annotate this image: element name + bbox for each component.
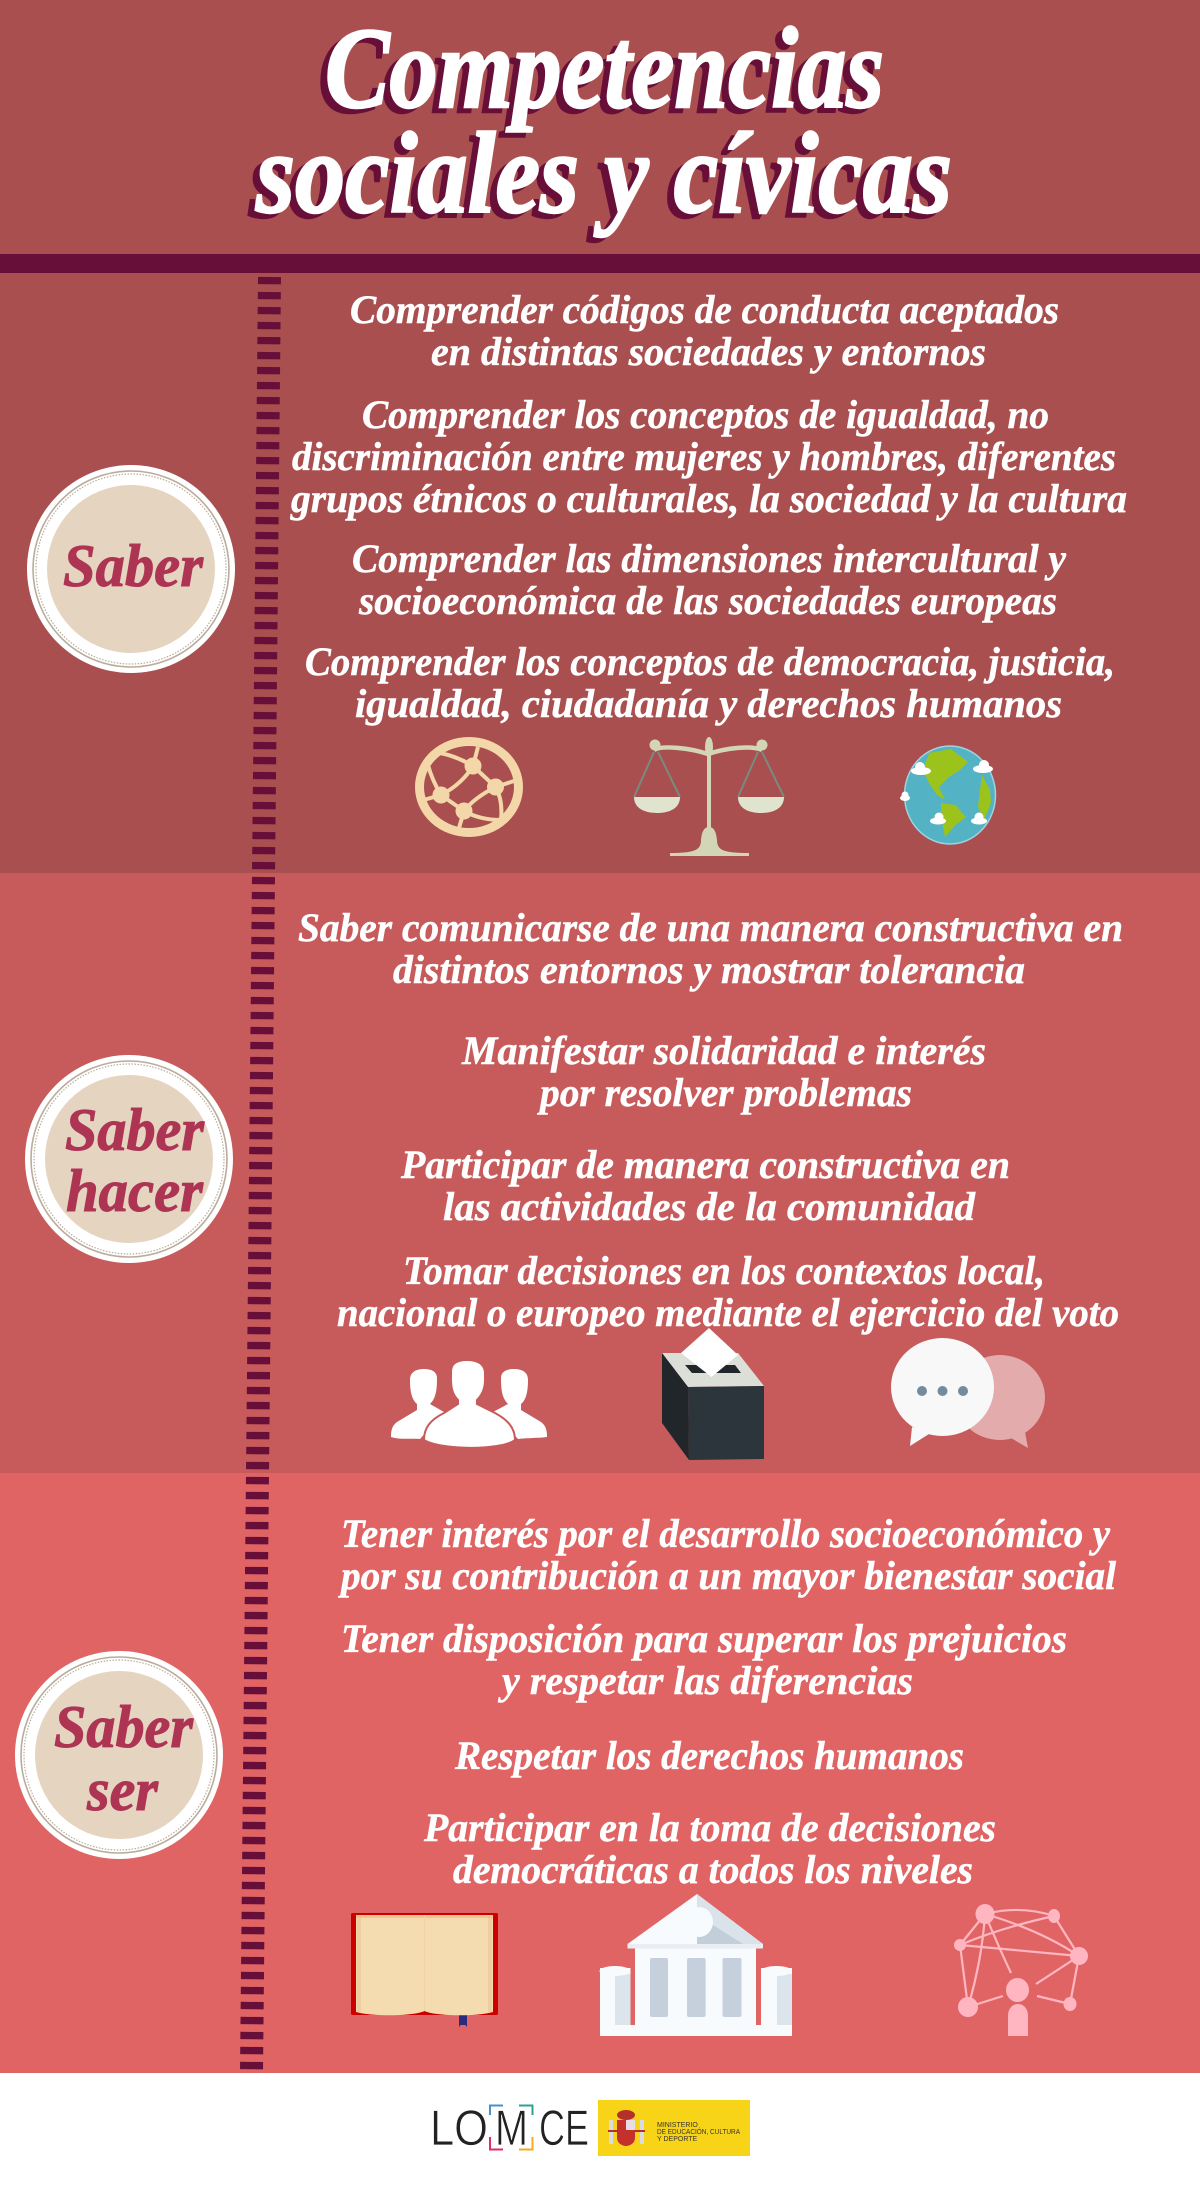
header band bbox=[0, 0, 1200, 254]
panel: saber text: discriminación entre mujeres y hombres, diferentes bbox=[292, 434, 1116, 479]
panel: saber text: Comprender códigos de conducta aceptados bbox=[350, 287, 1059, 332]
panel: saber hacer text bbox=[298, 905, 1123, 1335]
panel: saber hacer text: por resolver problemas bbox=[537, 1070, 912, 1115]
section background: saber bbox=[0, 273, 1200, 873]
badge: saber hacer: hacer bbox=[66, 1158, 204, 1224]
icon: open book bbox=[351, 1913, 498, 2027]
title: sociales y cívicas bbox=[255, 110, 952, 237]
badge: saber hacer bbox=[25, 1055, 233, 1263]
panel: saber text: Comprender las dimensiones intercultural y bbox=[352, 536, 1066, 581]
icon: earth with clouds bbox=[900, 746, 996, 844]
icon: balance scales bbox=[634, 737, 784, 856]
panel: saber hacer text: Saber comunicarse de una manera constructiva en bbox=[298, 905, 1123, 950]
title bbox=[248, 5, 952, 242]
icon: person network bbox=[954, 1904, 1088, 2036]
badge: saber ser: Saber bbox=[54, 1694, 194, 1760]
badge: saber ser bbox=[15, 1651, 223, 1859]
panel: saber text: en distintas sociedades y entornos bbox=[431, 329, 986, 374]
logo: ministerio: Y DEPORTE bbox=[657, 2136, 698, 2143]
panel: saber ser text: Tener interés por el desarrollo socioeconómico y bbox=[341, 1511, 1110, 1556]
panel: saber hacer text: distintos entornos y mostrar tolerancia bbox=[393, 947, 1025, 992]
badge: saber ser: ser bbox=[86, 1757, 159, 1823]
header divider bar bbox=[0, 254, 1200, 273]
logo: LOMCE: M bbox=[495, 2100, 528, 2156]
panel: saber text: Comprender los conceptos de democracia, justicia, bbox=[305, 639, 1115, 684]
panel: saber hacer text: Participar de manera constructiva en bbox=[400, 1142, 1010, 1187]
panel: saber text: grupos étnicos o culturales, la sociedad y la cultura bbox=[290, 476, 1127, 521]
logo: LOMCE bbox=[430, 2100, 589, 2156]
panel: saber ser text: Tener disposición para superar los prejuicios bbox=[341, 1616, 1067, 1661]
badge: saber bbox=[27, 465, 235, 673]
logo: LOMCE: LO bbox=[430, 2100, 488, 2156]
section background: saber hacer bbox=[0, 873, 1200, 1473]
section background: saber ser bbox=[0, 1473, 1200, 2073]
badge: saber hacer: Saber bbox=[65, 1097, 205, 1163]
icon: classical building bbox=[600, 1894, 792, 2036]
panel: saber ser text: por su contribución a un mayor bienestar social bbox=[338, 1553, 1117, 1598]
logo: ministerio bbox=[598, 2100, 750, 2156]
panel: saber hacer text: Tomar decisiones en los contextos local, bbox=[403, 1248, 1045, 1293]
title: Competencias bbox=[318, 10, 877, 137]
icon: speech bubbles bbox=[891, 1338, 1045, 1448]
panel: saber ser text: democráticas a todos los niveles bbox=[453, 1847, 973, 1892]
logo: LOMCE: CE bbox=[539, 2100, 589, 2156]
panel: saber ser text bbox=[338, 1511, 1117, 1892]
icon: ballot box bbox=[662, 1328, 764, 1460]
panel: saber ser text: y respetar las diferencias bbox=[498, 1658, 913, 1703]
panel: saber text: socioeconómica de las sociedades europeas bbox=[358, 578, 1057, 623]
dashed vertical timeline bbox=[252, 277, 270, 2072]
panel: saber text: igualdad, ciudadanía y derechos humanos bbox=[355, 681, 1062, 726]
logo: ministerio: DE EDUCACIÓN, CULTURA bbox=[657, 2127, 740, 2136]
icon: group of people bbox=[391, 1360, 547, 1448]
title: Competencias bbox=[325, 5, 884, 132]
panel: saber ser text: Participar en la toma de decisiones bbox=[423, 1805, 996, 1850]
badge: saber: Saber bbox=[63, 533, 204, 599]
panel: saber hacer text: Manifestar solidaridad e interés bbox=[461, 1028, 986, 1073]
panel: saber text bbox=[290, 287, 1127, 726]
panel: saber text: Comprender los conceptos de igualdad, no bbox=[362, 392, 1049, 437]
logo: ministerio: MINISTERIO bbox=[657, 2122, 698, 2129]
panel: saber hacer text: nacional o europeo mediante el ejercicio del voto bbox=[337, 1290, 1119, 1335]
title: sociales y cívicas bbox=[248, 115, 945, 242]
panel: saber hacer text: las actividades de la comunidad bbox=[443, 1184, 976, 1229]
icon: network globe bbox=[420, 742, 518, 832]
panel: saber ser text: Respetar los derechos humanos bbox=[454, 1733, 964, 1778]
